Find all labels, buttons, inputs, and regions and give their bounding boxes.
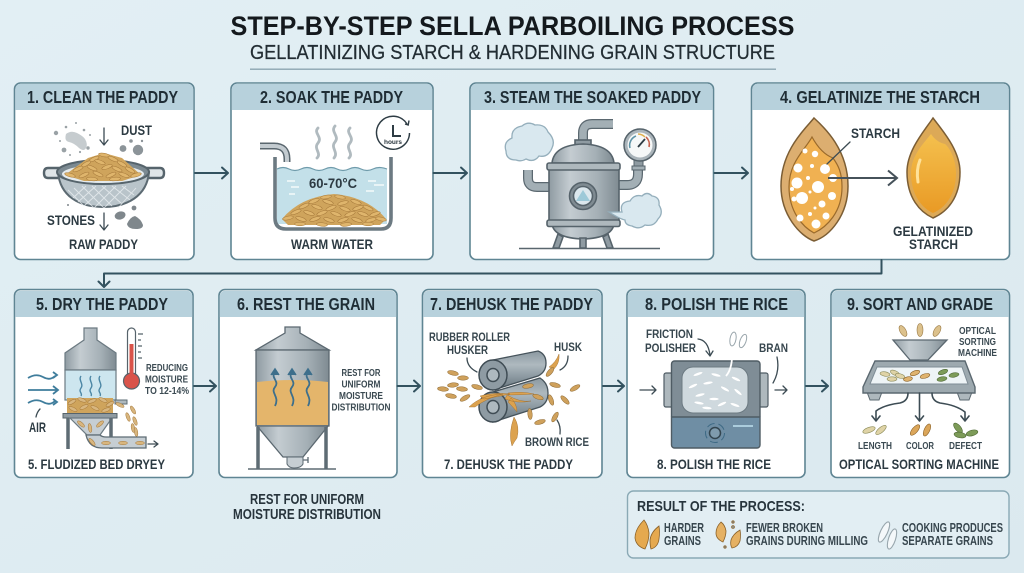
leader: brown rice bbox=[557, 420, 560, 434]
panel: 6. rest the grain bbox=[219, 290, 397, 478]
label: reducing moisture: TO 12-14% bbox=[145, 385, 190, 397]
label: rubber roller husker bbox=[429, 332, 511, 357]
caption: dehusk: 7. DEHUSK THE PADDY bbox=[444, 456, 574, 472]
label: harder grains: HARDER bbox=[664, 521, 704, 535]
icon: right gauge pipe bbox=[618, 168, 638, 185]
icon: raw grain with starch granules bbox=[781, 118, 848, 241]
arrows: sort outputs bbox=[872, 393, 969, 421]
label: optical sorting machine: SORTING bbox=[959, 336, 996, 348]
leader: husker bbox=[467, 358, 477, 372]
label: reducing moisture bbox=[145, 362, 190, 397]
label: rubber roller husker: HUSKER bbox=[447, 345, 489, 357]
label: cooking produces separate grains: SEPARATE GRAINS bbox=[902, 534, 993, 548]
label: friction polisher: POLISHER bbox=[645, 343, 697, 355]
icon: steam bbox=[316, 126, 351, 158]
arrow: step 7 to 8 bbox=[603, 380, 624, 392]
icon: falling grains bbox=[897, 324, 943, 338]
icon: sorting table bbox=[863, 361, 975, 400]
caption: fluidized bed dryer: 5. FLUDIZED BED DRYEY bbox=[28, 456, 166, 472]
icon: separate cooked grains bbox=[876, 521, 899, 550]
panel: 8. polish the rice bbox=[627, 290, 805, 478]
label: rubber roller husker: RUBBER ROLLER bbox=[429, 332, 511, 344]
label: gelatinized starch: GELATINIZED bbox=[893, 223, 973, 239]
icon: defect grains bbox=[952, 422, 979, 439]
label: gelatinized starch: STARCH bbox=[909, 236, 958, 252]
icon: left steam pipe bbox=[528, 170, 549, 187]
labels: sort criteria: COLOR bbox=[906, 440, 934, 452]
icon: steam vessel bbox=[547, 140, 620, 248]
arrow: step 6 to 7 bbox=[398, 380, 420, 392]
icon: water tank bbox=[275, 157, 391, 229]
decorative ground line bbox=[519, 248, 660, 250]
label: harder grains: GRAINS bbox=[664, 534, 701, 548]
panel: 3. steam the soaked paddy bbox=[470, 83, 714, 260]
icon: falling dust bbox=[54, 122, 91, 156]
icon: silo bbox=[248, 327, 336, 469]
icon: air arrows bbox=[28, 372, 58, 405]
arrow: step 1 to 2 bbox=[195, 168, 228, 178]
label: fewer broken grains bbox=[746, 521, 868, 548]
leader: bran bbox=[773, 357, 778, 383]
icon: scattered grains left bbox=[437, 370, 483, 403]
label: husk: HUSK bbox=[554, 342, 583, 354]
subtitle: GELLATINIZING STARCH & HARDENING GRAIN STRUCTURE bbox=[250, 42, 775, 64]
icon: scattered grains right bbox=[522, 366, 581, 426]
arrow: polisher out bbox=[775, 386, 787, 394]
panel: 5. dry the paddy bbox=[14, 290, 193, 478]
arrow: step 2 to 3 bbox=[434, 168, 467, 178]
panel: 1. clean the paddy bbox=[14, 83, 194, 260]
leader: bran path bbox=[726, 350, 732, 376]
label: fewer broken grains: FEWER BROKEN bbox=[746, 521, 823, 535]
labels: sort criteria: LENGTH bbox=[858, 440, 892, 452]
icon: pressure gauge bbox=[624, 129, 656, 170]
caption: polish: 8. POLISH THE RICE bbox=[657, 456, 771, 472]
heading: step 2: 2. SOAK THE PADDY bbox=[260, 87, 403, 107]
arrow: conveyor out bbox=[148, 441, 158, 447]
caption: rest below panel: MOISTURE DISTRIBUTION bbox=[233, 507, 381, 523]
caption: rest below panel: REST FOR UNIFORM bbox=[250, 492, 364, 508]
arrow: gelatinization bbox=[828, 170, 897, 186]
icon: soaked paddy pile bbox=[282, 194, 387, 227]
heading: result: RESULT OF THE PROCESS: bbox=[637, 498, 805, 515]
icon: hopper bbox=[893, 340, 947, 360]
panel: 9. sort and grade bbox=[831, 290, 1010, 478]
label: cooking produces separate grains bbox=[902, 521, 1003, 548]
arrow: dust down bbox=[100, 128, 108, 145]
label: rest for uniform moisture distribution: REST FOR bbox=[342, 367, 381, 379]
icon: inlet pipe bbox=[260, 146, 287, 162]
label: reducing moisture: MOISTURE bbox=[145, 374, 188, 386]
arrow: polisher in bbox=[640, 386, 656, 394]
arrow: step 4 down to step 5 bbox=[98, 260, 882, 287]
label: harder grains bbox=[664, 521, 704, 548]
arrow: stones down bbox=[100, 213, 108, 230]
panel: 4. gelatinize the starch bbox=[752, 83, 1010, 260]
icon: clock: hours bbox=[384, 139, 402, 146]
icon: husk flakes bbox=[469, 354, 559, 446]
icon: gelatinized grain bbox=[907, 118, 960, 218]
icon: length grains bbox=[862, 424, 888, 436]
heading: step 3: 3. STEAM THE SOAKED PADDY bbox=[484, 87, 701, 107]
icon: polishing machine bbox=[664, 361, 768, 448]
heading: step 9: 9. SORT AND GRADE bbox=[847, 294, 993, 314]
panel: 7. dehusk the paddy bbox=[422, 290, 602, 478]
label: fewer broken grains: GRAINS DURING MILLING bbox=[746, 534, 868, 548]
icon: color grains bbox=[909, 423, 932, 437]
labels: sort criteria bbox=[858, 440, 982, 452]
title: STEP-BY-STEP SELLA PARBOILING PROCESS bbox=[230, 11, 794, 41]
panel: 2. soak the paddy bbox=[231, 83, 433, 260]
icon: stones bbox=[67, 204, 143, 229]
arrow: step 8 to 9 bbox=[806, 380, 828, 392]
label: dust: DUST bbox=[121, 122, 152, 138]
icon: top pipe bbox=[583, 124, 613, 142]
label: rest for uniform moisture distribution: UNIFORM bbox=[342, 378, 381, 390]
arrow: step 3 to 4 bbox=[714, 168, 748, 178]
label: optical sorting machine bbox=[958, 325, 997, 359]
label: friction polisher: FRICTION bbox=[646, 329, 693, 341]
heading: step 5: 5. DRY THE PADDY bbox=[36, 294, 168, 314]
icon: bran flakes bbox=[729, 332, 748, 349]
panel: result of the process bbox=[628, 491, 1009, 558]
icon: upper roller bbox=[479, 351, 546, 390]
label: raw paddy: RAW PADDY bbox=[69, 236, 139, 252]
icon: lower roller bbox=[479, 378, 548, 422]
label: friction polisher bbox=[645, 329, 697, 355]
icon: harder grains bbox=[635, 520, 660, 549]
icon: dust particles bbox=[120, 139, 143, 155]
leader: air bbox=[36, 409, 40, 417]
label: rest for uniform moisture distribution: DISTRIBUTION bbox=[332, 402, 390, 414]
leader: starch bbox=[827, 142, 850, 164]
icon: colander with paddy bbox=[44, 152, 164, 208]
leader: husk bbox=[560, 356, 568, 370]
heading: step 8: 8. POLISH THE RICE bbox=[645, 294, 788, 314]
heading: step 4: 4. GELATINIZE THE STARCH bbox=[780, 87, 980, 107]
heading: step 6: 6. REST THE GRAIN bbox=[237, 294, 375, 314]
caption: rest below panel bbox=[233, 492, 381, 523]
icon: left steam cloud bbox=[505, 123, 553, 161]
icon: right steam cloud bbox=[609, 194, 661, 228]
heading: step 1: 1. CLEAN THE PADDY bbox=[27, 87, 178, 107]
icon: clock bbox=[377, 116, 410, 149]
label: warm water: WARM WATER bbox=[291, 236, 373, 252]
icon: fewer broken grains bbox=[716, 521, 740, 548]
arrow: step 5 to 6 bbox=[194, 380, 216, 392]
label: reducing moisture: REDUCING bbox=[146, 362, 188, 374]
label: gelatinized starch bbox=[893, 223, 973, 252]
icon: thermometer bbox=[124, 328, 143, 389]
label: temperature: 60-70°C bbox=[309, 175, 357, 191]
label: air: AIR bbox=[29, 419, 46, 435]
label: optical sorting machine: OPTICAL bbox=[959, 325, 996, 337]
label: rest for uniform moisture distribution bbox=[332, 367, 390, 414]
label: brown rice: BROWN RICE bbox=[525, 437, 589, 449]
leader: polisher bbox=[698, 339, 713, 356]
label: bran: BRAN bbox=[759, 343, 788, 355]
icon: fluidized bed dryer bbox=[63, 328, 146, 449]
label: optical sorting machine: MACHINE bbox=[958, 347, 997, 359]
label: stones: STONES bbox=[47, 212, 95, 228]
label: starch: STARCH bbox=[851, 125, 900, 141]
label: rest for uniform moisture distribution: MOISTURE bbox=[339, 390, 383, 402]
labels: sort criteria: DEFECT bbox=[949, 440, 982, 452]
heading: step 7: 7. DEHUSK THE PADDY bbox=[430, 294, 593, 314]
